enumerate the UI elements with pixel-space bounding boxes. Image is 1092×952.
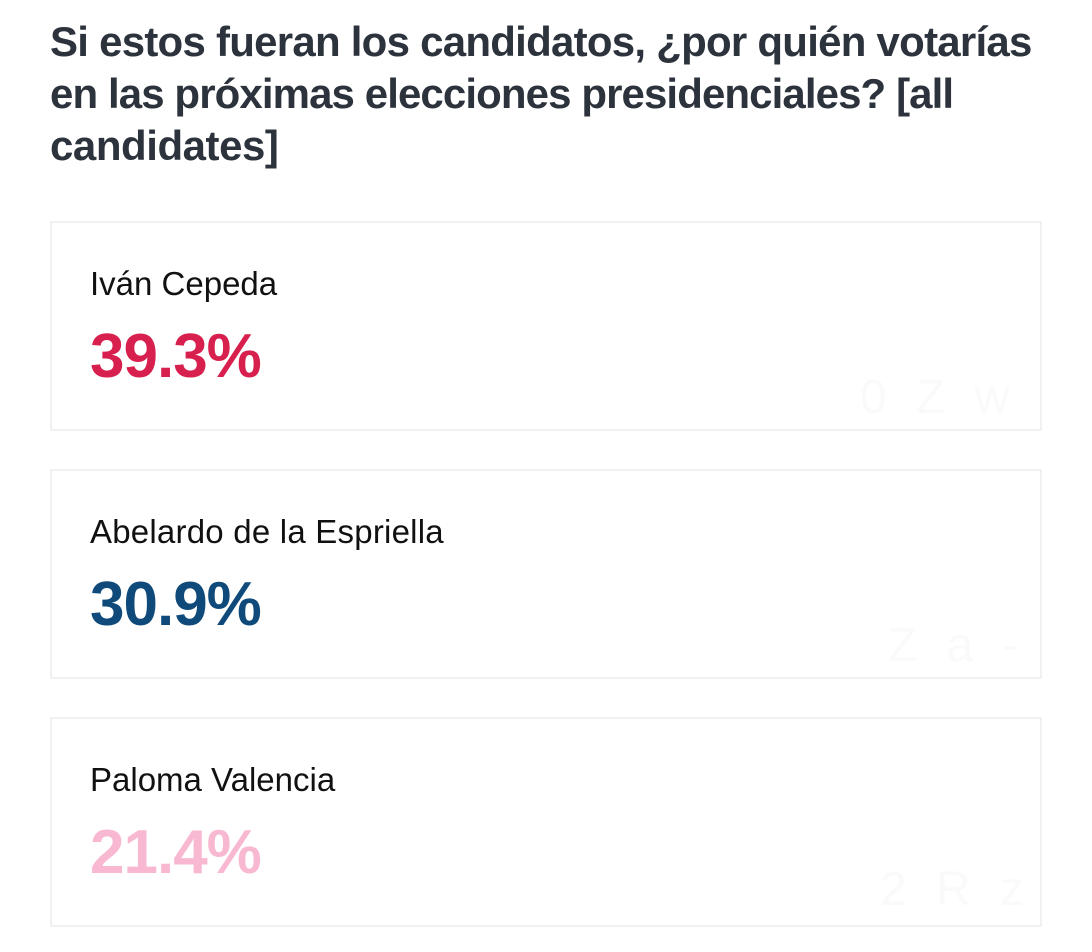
percentage: 21.4% [90, 818, 261, 887]
watermark: 0 Z w [860, 371, 1017, 424]
candidate name: Iván Cepeda [90, 265, 277, 302]
title [50, 18, 1032, 169]
panel: Paloma Valencia [50, 717, 1042, 927]
watermark: 2 R z [880, 863, 1032, 916]
candidate name: Abelardo de la Espriella [90, 513, 444, 550]
percentage: 30.9% [90, 570, 261, 639]
panel: Abelardo de la Espriella [50, 469, 1042, 679]
title: candidates] [50, 122, 278, 169]
title: Si estos fueran los candidatos, ¿por quién votarías [50, 18, 1032, 65]
title: en las próximas elecciones presidenciales? [all [50, 70, 953, 117]
percentage: 39.3% [90, 322, 261, 391]
panel: Iván Cepeda [50, 221, 1042, 431]
candidate name: Paloma Valencia [90, 761, 335, 798]
watermark: Z a - [888, 619, 1027, 672]
